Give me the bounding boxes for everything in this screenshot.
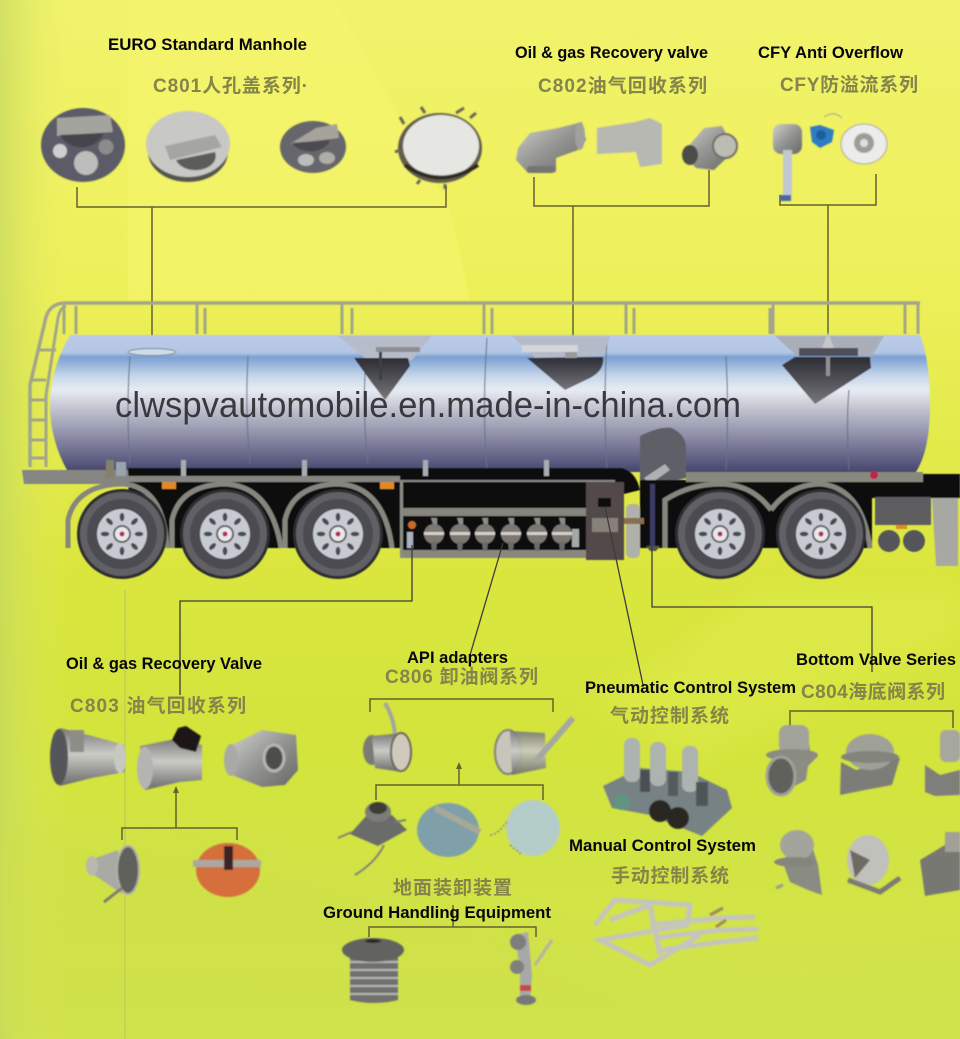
loading arm valve bbox=[510, 932, 552, 1005]
label: CFY series: CFY防溢流系列 bbox=[780, 73, 918, 96]
bottom valve top 2 bbox=[840, 734, 900, 795]
label: manual control Chinese: 手动控制系统 bbox=[611, 864, 729, 887]
cutaway 1 bbox=[338, 336, 432, 400]
heading: Manual Control System: Manual Control System bbox=[569, 836, 756, 855]
fender arcs bbox=[68, 484, 870, 548]
chassis black bbox=[128, 468, 960, 548]
tank hangers bbox=[106, 460, 549, 478]
C806 coupler a bbox=[363, 703, 411, 772]
blue-grey cap bbox=[417, 803, 480, 857]
manual control assembly bbox=[595, 900, 758, 965]
wheel 1 bbox=[77, 489, 167, 579]
blue cap bbox=[810, 114, 842, 148]
label: C804 series: C804海底阀系列 bbox=[801, 680, 945, 703]
label: C803 series: C803 油气回收系列 bbox=[70, 695, 246, 717]
bottom valve lower 2 bbox=[847, 835, 900, 892]
cutaway 3 bbox=[775, 332, 884, 404]
overflow sensor bbox=[841, 124, 887, 164]
cutaway 2 bbox=[512, 336, 610, 390]
label: C806 series: C806 卸油阀系列 bbox=[385, 666, 538, 688]
foot valves bbox=[424, 518, 572, 551]
C806 coupler b bbox=[495, 718, 573, 775]
wheel 3 bbox=[293, 489, 383, 579]
wheel 5 bbox=[776, 489, 866, 579]
bottom valve pipe bbox=[646, 484, 660, 551]
tank body bbox=[50, 335, 930, 472]
valve C802 b bbox=[597, 118, 662, 167]
connector lines: bottom groups bbox=[122, 507, 953, 937]
bottom valve top 1 bbox=[766, 725, 818, 795]
valve C802 c bbox=[682, 126, 737, 170]
orange cap bbox=[193, 843, 261, 897]
heading: Bottom Valve Series: Bottom Valve Series bbox=[796, 650, 956, 669]
handrail bbox=[30, 303, 920, 467]
heading: Ground Handling Equipment: Ground Handling Equipment bbox=[323, 903, 551, 922]
rear equipment bbox=[875, 497, 958, 566]
connector lines: top groups bbox=[77, 170, 876, 350]
label: ground handling Chinese: 地面装卸装置 bbox=[393, 877, 512, 899]
heading: Oil and gas Recovery Valve: Oil & gas Recovery Valve bbox=[66, 654, 262, 673]
heading: API adapters: API adapters bbox=[407, 648, 508, 667]
C803 coupler a bbox=[50, 728, 126, 786]
wheel 2 bbox=[180, 489, 270, 579]
heading: EURO Standard Manhole: EURO Standard Manhole bbox=[108, 35, 307, 54]
marker lamps bbox=[162, 482, 907, 529]
bottom valve lower 1 bbox=[774, 830, 822, 895]
label: C801 series: C801人孔盖系列· bbox=[153, 75, 308, 97]
bottom valve lower 3 bbox=[920, 832, 960, 896]
rear sump bbox=[640, 428, 686, 484]
manhole 2 bbox=[146, 111, 230, 182]
pale cap bbox=[490, 800, 560, 856]
pneumatic control block bbox=[603, 738, 732, 836]
heading: CFY Anti Overflow: CFY Anti Overflow bbox=[758, 43, 904, 62]
side rails bbox=[22, 470, 923, 484]
manhole 3 bbox=[280, 121, 346, 173]
watermark: clwspvautomobile.en.made-in-china.com bbox=[115, 384, 741, 425]
label: pneumatic control Chinese: 气动控制系统 bbox=[610, 704, 729, 727]
overflow probe bbox=[773, 124, 802, 201]
C803 coupler c bbox=[224, 730, 298, 787]
C803 coupler b bbox=[137, 726, 202, 790]
manhole A bbox=[128, 348, 176, 356]
heading: Pneumatic Control System: Pneumatic Control System bbox=[585, 678, 796, 697]
C803 adapter bbox=[86, 846, 139, 902]
label: C802 series: C802油气回收系列 bbox=[538, 75, 707, 97]
bellows hose bbox=[342, 938, 404, 1003]
air filter bbox=[624, 504, 644, 558]
bottom valve top 3 bbox=[925, 730, 960, 796]
heading: Oil and gas Recovery valve: Oil & gas Recovery valve bbox=[515, 43, 708, 62]
wheel 4 bbox=[675, 489, 765, 579]
tanker truck bbox=[22, 303, 960, 579]
cabinet bbox=[400, 482, 624, 560]
manhole 4 bbox=[395, 107, 482, 189]
manhole 1 bbox=[41, 108, 125, 182]
tank seams bbox=[128, 338, 849, 470]
C806 adapter bbox=[338, 802, 407, 875]
valve C802 a bbox=[516, 122, 586, 173]
